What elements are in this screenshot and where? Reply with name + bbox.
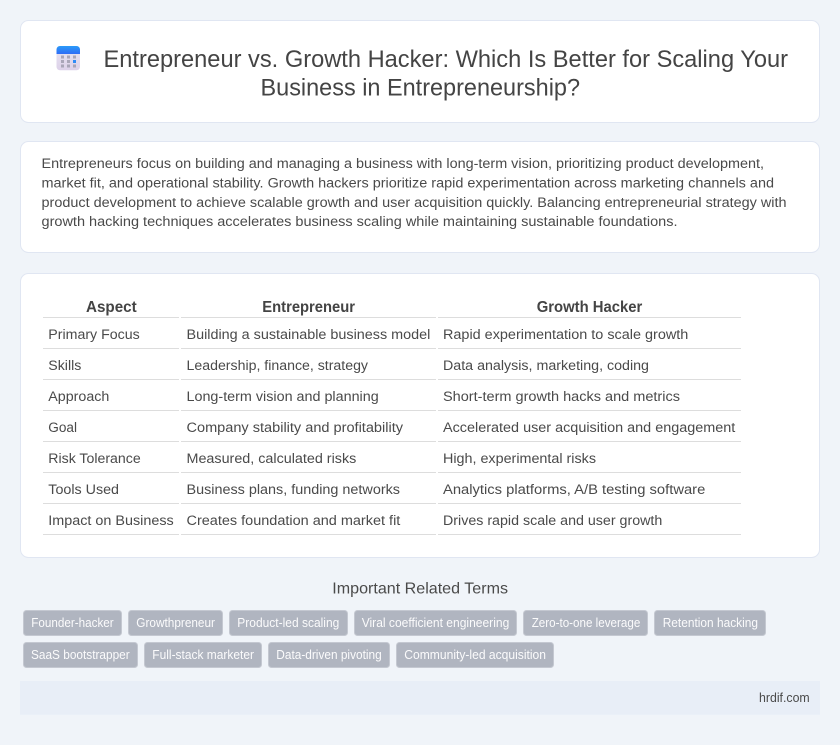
tags: related terms: Zero-to-one leverage bbox=[532, 615, 640, 630]
heading: important related terms: Important Related Terms bbox=[332, 580, 508, 597]
panel: summary text: growth hacking techniques accelerates business scaling while maintaining sustainable foundations. bbox=[42, 214, 678, 230]
row: impact on business: Drives rapid scale and user growth bbox=[443, 513, 662, 529]
row: approach: Short-term growth hacks and metrics bbox=[443, 389, 680, 405]
tags: related terms: Retention hacking bbox=[663, 615, 758, 630]
row: primary focus: Rapid experimentation to scale growth bbox=[443, 327, 688, 343]
table header: Growth Hacker bbox=[537, 299, 642, 316]
row: impact on business: Impact on Business bbox=[48, 513, 174, 529]
row: risk tolerance: High, experimental risks bbox=[443, 451, 596, 467]
row: tools used: Analytics platforms, A/B testing software bbox=[443, 482, 705, 498]
row: impact on business bbox=[48, 513, 662, 529]
row: primary focus: Primary Focus bbox=[48, 327, 140, 343]
row: skills: Data analysis, marketing, coding bbox=[443, 358, 649, 374]
title: Entrepreneur vs. Growth Hacker: Which Is Better for Scaling Your bbox=[104, 46, 788, 73]
row: skills bbox=[48, 358, 649, 374]
tags: related terms: Data-driven pivoting bbox=[276, 647, 382, 662]
panel: title card bbox=[20, 20, 820, 122]
row: goal: Company stability and profitability bbox=[186, 420, 404, 436]
row: tools used: Business plans, funding networks bbox=[186, 482, 400, 498]
tags: related terms: Viral coefficient engineering bbox=[362, 615, 509, 630]
panel: summary text: product development to achieve scalable growth and user acquisition quickly. Balancing entrepreneurial strategy with bbox=[42, 195, 786, 211]
footer bar bbox=[20, 681, 820, 715]
row: primary focus: Building a sustainable business model bbox=[186, 327, 430, 343]
panel: comparison table bbox=[20, 274, 820, 558]
tags: related terms: Product-led scaling bbox=[237, 615, 339, 630]
icon: calendar bbox=[56, 46, 80, 70]
row: tools used: Tools Used bbox=[48, 482, 119, 498]
table header: Aspect bbox=[86, 299, 137, 316]
row: goal: Accelerated user acquisition and engagement bbox=[443, 420, 735, 436]
row: approach: Approach bbox=[48, 389, 109, 405]
row: primary focus bbox=[48, 327, 688, 343]
row: tools used bbox=[48, 482, 705, 498]
tags: related terms: SaaS bootstrapper bbox=[31, 647, 130, 662]
tags: related terms: Community-led acquisition bbox=[404, 647, 546, 662]
row: risk tolerance: Risk Tolerance bbox=[48, 451, 141, 467]
tags: related terms: Founder-hacker bbox=[31, 615, 114, 630]
panel: summary text: market fit, and operational stability. Growth hackers prioritize rapid experimentation across marketing channels and bbox=[42, 176, 774, 192]
row: goal: Goal bbox=[48, 420, 77, 436]
table header: Entrepreneur bbox=[262, 299, 355, 316]
title: Business in Entrepreneurship? bbox=[260, 74, 580, 102]
title bbox=[104, 46, 788, 102]
tags: related terms: Full-stack marketer bbox=[152, 647, 255, 662]
row: skills: Skills bbox=[48, 358, 81, 374]
row: approach bbox=[48, 389, 680, 405]
row: risk tolerance bbox=[48, 451, 596, 467]
row: risk tolerance: Measured, calculated risks bbox=[186, 451, 356, 467]
row: approach: Long-term vision and planning bbox=[186, 389, 379, 405]
table header bbox=[86, 299, 642, 316]
footer bar: hrdif.com bbox=[759, 690, 810, 705]
tags: related terms bbox=[24, 610, 766, 668]
row: skills: Leadership, finance, strategy bbox=[186, 358, 369, 374]
panel: summary text: Entrepreneurs focus on building and managing a business with long-term vision, prioritizing product development, bbox=[42, 156, 764, 172]
panel: summary text bbox=[20, 142, 820, 252]
tags: related terms: Growthpreneur bbox=[136, 615, 216, 630]
row: impact on business: Creates foundation and market fit bbox=[186, 513, 400, 529]
row: goal bbox=[48, 420, 735, 436]
